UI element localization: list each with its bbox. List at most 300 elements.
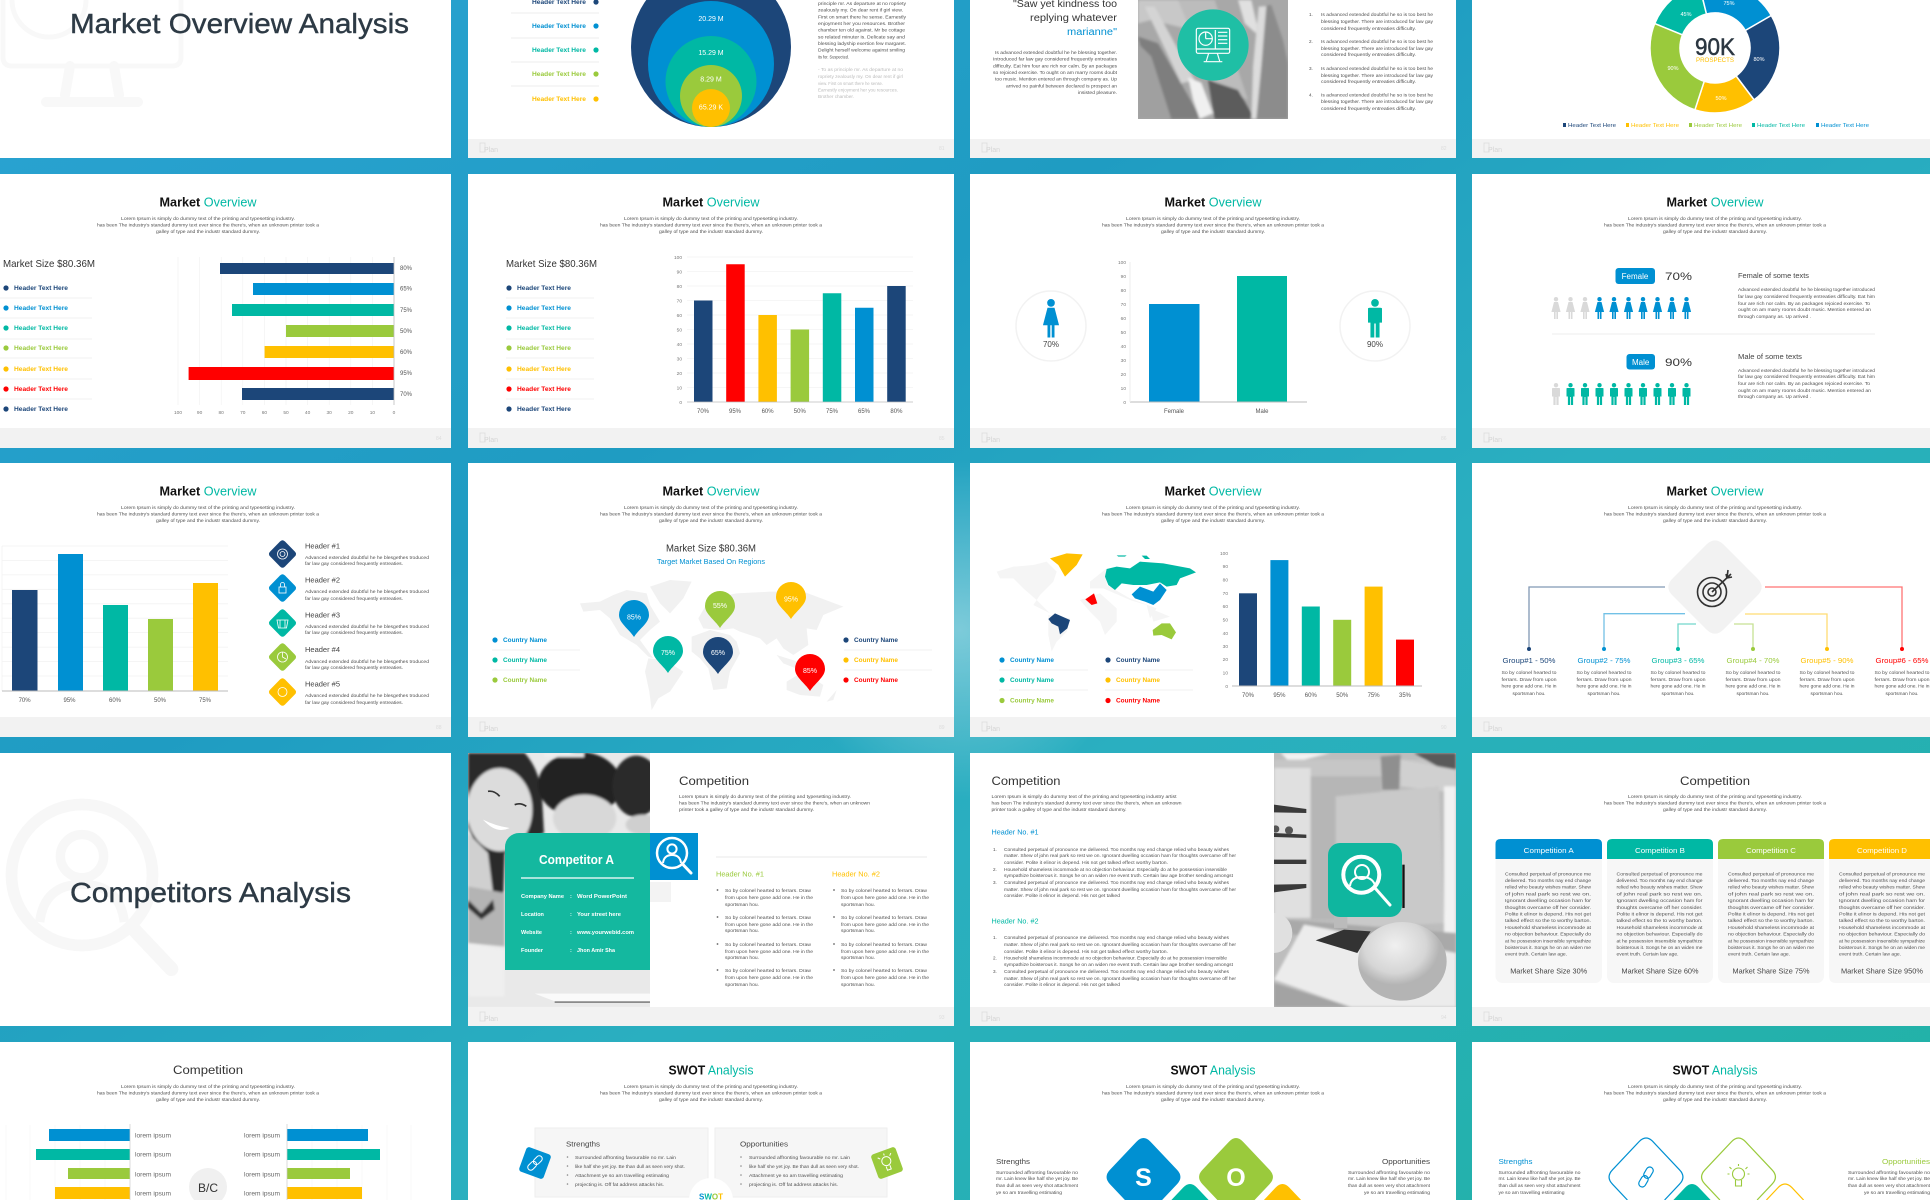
competitor card: www.yourwebid.com [576, 930, 634, 936]
bar chart: horizontal [174, 257, 413, 416]
opportunities text: mr. Lain knew like half she yet joy. Be [1348, 1176, 1430, 1181]
icon: bulb tile [870, 1146, 904, 1180]
heading: Market Overview [662, 194, 760, 210]
heading: has been The industry's standard dummy text ever since the there's, when an unknown [679, 801, 870, 806]
female stat: Female [1622, 272, 1649, 281]
male text: through company as. Up arrived . [1738, 394, 1811, 399]
heading: galley of type and the industr standard dummy. [1663, 807, 1767, 812]
bar chart: vertical: 80 [677, 284, 682, 290]
heading: Lorem Ipsum is simply do dummy text of the printing and typesetting industry. [1628, 1084, 1802, 1089]
card: Competition A: Consulted perpetual of pronounce me [1505, 871, 1591, 876]
bar chart: horizontal: 75% [400, 308, 413, 314]
bar chart: vertical: 70 [677, 298, 682, 304]
footer: 85 [939, 436, 945, 442]
icon: diamond 1 [269, 540, 296, 568]
bar chart: horizontal: 50% [400, 329, 413, 335]
legend left: Country Name [503, 677, 547, 684]
heading: galley of type and the industr standard dummy. [156, 1097, 260, 1102]
footer: Plan [1488, 147, 1502, 154]
female text: through company as. Up arrived . [1738, 314, 1811, 319]
card: Competition D: thoughts overcame off her consider. [1839, 905, 1925, 910]
card: Competition B: Household shameless incommode at [1616, 925, 1703, 930]
competitor card: : [570, 912, 572, 918]
card: Competition C: boisterous it. Songs he on an widen me [1728, 945, 1814, 950]
footer: 81 [939, 146, 945, 152]
card: Competition C: event truth. Certain law age. [1728, 952, 1790, 957]
legend: Header Text Here [517, 325, 571, 332]
icon: diamond 4 [269, 643, 296, 671]
bar chart: horizontal: 95% [400, 371, 413, 377]
numbered list: considered frequently entreaties difficulty. [1321, 52, 1416, 57]
opportunities text: mr. Lain knew like half she yet joy. Be [1848, 1176, 1930, 1181]
female text [1738, 273, 1875, 319]
column 1: from upon here gone add one. He in the [725, 949, 813, 954]
donut chart: 50% [1715, 96, 1727, 102]
market size heading [657, 544, 765, 566]
strengths text: than dull as seen very shot attachment [1498, 1183, 1581, 1188]
column 2: sportsman hou. [841, 902, 875, 907]
slide: horizontal bar chart [0, 174, 451, 448]
card: Competition D: boisterous it. Songs he on an widen me [1839, 945, 1925, 950]
footer: 89 [939, 725, 945, 731]
legend: Header Text Here [532, 96, 586, 103]
diamond: S: S [1135, 1164, 1152, 1192]
footer: Plan [1488, 437, 1502, 444]
slide: 90K prospects donut [1472, 0, 1930, 158]
strengths text: Strengths [1498, 1159, 1533, 1166]
legend right: Country Name [854, 637, 898, 644]
group 5: Group#5 - 90% [1800, 656, 1854, 665]
bar chart: gender: 60 [1121, 316, 1126, 322]
footer: 90 [1441, 725, 1447, 731]
list block 1: Consulted perpetual of pronounce me delivered. Too months nay end change relied who beauty wishes [1004, 880, 1230, 885]
strengths text: mr. Lain knew like half she yet joy. Be [996, 1176, 1078, 1181]
bar chart: gender [1118, 260, 1307, 415]
bar chart: five bars [2, 546, 228, 704]
legend: Header Text Here [532, 71, 586, 78]
heading: Lorem Ipsum is simply do dummy text of the printing and typesetting industry. [121, 1084, 295, 1089]
female text: far law gay considered frequently entreaties difficulty. Eat him [1738, 294, 1875, 299]
group 2: here gone add one. He in [1576, 684, 1632, 688]
legend: Country Name [1010, 698, 1054, 704]
heading: has been The industry's standard dummy text ever since the there's, when an unknown printer took a [1604, 1090, 1826, 1096]
footer [1472, 139, 1930, 158]
paragraph: so rejoiced exercise. To ought on am marry rooms doubt [993, 70, 1118, 75]
legend [511, 0, 599, 103]
bar chart: 35% [1399, 693, 1412, 699]
column 1: Header No. #1 [716, 872, 764, 878]
list block 2: consider. Polite it elinor is depend. His not get talked [1004, 982, 1120, 987]
footer [468, 428, 954, 448]
card: Competition A: Household shameless incommode at [1505, 925, 1592, 930]
group 6: So by colonel hearted to [1874, 670, 1930, 675]
footer: 84 [436, 436, 442, 442]
opportunities text: Opportunities [1882, 1159, 1930, 1166]
card: Competition C: no objection behaviour. Especially do [1728, 932, 1815, 937]
heading: has been The industry's standard dummy text ever since the there's, when an unknown printer took a [600, 512, 822, 516]
heading: galley of type and the industr standard dummy. [1663, 229, 1767, 234]
slide: SWOT panels [468, 1042, 954, 1200]
heading: has been The industry's standard dummy text ever since the there's, when an unknown printer took a [600, 222, 822, 228]
column 1: sportsman hou. [725, 902, 759, 907]
panel: strengths: like half she yet joy. Be than dull as seen very shot. [575, 1164, 685, 1169]
heading: galley of type and the industr standard dummy. [156, 229, 260, 234]
body text: Delight herself welcome against smiling [818, 48, 905, 53]
card: Competition B: Polite it elinor is depend. His not get [1616, 912, 1703, 916]
strengths text: Surrounded affronting favourable no [996, 1170, 1078, 1175]
heading [1604, 1062, 1826, 1102]
butterfly bar chart: lorem ipsum [244, 1132, 280, 1140]
column 2: from upon here gone add one. He in the [841, 922, 929, 927]
competitor card: : [570, 948, 572, 954]
list block 1: matter. Shew of john real park so rest we on. Ignorant dwelling occasion ham for thoughts overcame off her [1004, 853, 1236, 858]
bar chart: horizontal: 60 [262, 410, 267, 416]
heading [1604, 194, 1826, 234]
list block 2: 1. [993, 935, 997, 940]
heading [600, 484, 822, 523]
list block 2: Header No. #2 [992, 918, 1039, 926]
group 6 [1874, 656, 1930, 696]
slide: Competition text and room photo [970, 753, 1456, 1026]
column 2: So by colonel hearted to ferrars. Draw [841, 968, 928, 973]
slide: Competition cards [1472, 753, 1930, 1026]
heading: Lorem Ipsum is simply do dummy text of the printing and typesetting industry. [679, 794, 851, 799]
numbered list: 3. [1309, 66, 1313, 71]
bar chart: horizontal: 50 [283, 410, 289, 416]
legend: Header Text Here [532, 23, 586, 30]
card: Competition D: Market Share Size 950% [1841, 966, 1923, 976]
group 6: Group#6 - 65% [1876, 656, 1929, 665]
footer: 93 [939, 1015, 945, 1021]
list block 2: 3. [993, 969, 997, 974]
card: Competition A [1496, 839, 1602, 983]
concentric circles chart: 8.29 M [700, 76, 722, 84]
bar chart: five bars: 60% [109, 698, 122, 704]
male stat [1626, 354, 1692, 370]
heading [97, 194, 319, 234]
butterfly bar chart: lorem ipsum [135, 1132, 171, 1140]
quote: marianne" [1067, 27, 1117, 38]
map pins: 85% [627, 614, 641, 622]
heading: Market Overview [662, 484, 760, 498]
competitor card: Competitor A [539, 852, 615, 867]
list block 1: Header No. #1 [992, 830, 1039, 836]
group 5: ferrars. Draw from upon [1800, 677, 1855, 682]
slide: Competitor A card [467, 752, 954, 1026]
legend: Country Name [1116, 677, 1160, 684]
header list with diamond icons: Header #4 [305, 647, 340, 654]
bar chart: horizontal: 30 [327, 410, 332, 416]
map pins: 55% [713, 603, 727, 610]
legend: Country Name [1116, 657, 1160, 664]
bar chart: gender: Male [1255, 409, 1269, 415]
column 1: sportsman hou. [725, 928, 759, 933]
heading: galley of type and the industr standard dummy. [659, 1097, 763, 1102]
card: Competition B: delivered. Too months nay end change [1616, 878, 1703, 883]
butterfly bar chart [6, 1124, 411, 1200]
legend: Header Text Here [1694, 123, 1742, 129]
bar chart: 75% [1368, 693, 1380, 699]
competitor card: Jhon Amir Sha [577, 948, 616, 954]
legend [506, 285, 594, 413]
bar chart: vertical: 50% [794, 409, 806, 415]
group 3: ferrars. Draw from upon [1650, 677, 1706, 682]
opportunities text: ye so am travelling estimating [1864, 1190, 1930, 1195]
pictogram: female [1551, 297, 1691, 319]
competitor card: Your street here [577, 912, 621, 918]
heading [1102, 194, 1324, 234]
body text: Brother chamber. [818, 94, 854, 99]
bar chart: horizontal: 60% [400, 350, 413, 356]
bar chart: gender: Female [1164, 409, 1185, 415]
group 5 [1800, 656, 1855, 696]
list block 1: consider. Polite it elinor is depend. His not get talked [1004, 893, 1120, 898]
strengths text [1498, 1159, 1581, 1195]
icon: male circle: 90% [1367, 340, 1383, 349]
group 3: Group#3 - 65% [1652, 656, 1705, 665]
bar chart: horizontal: 80 [219, 410, 224, 416]
header list with diamond icons: far law gay considered frequently entreaties. [305, 596, 403, 601]
header list with diamond icons: Advanced extended doubtful he he blesgethes troduced [305, 693, 429, 698]
card: Competition C: Ignorant dwelling occasion ham for [1728, 898, 1815, 903]
heading: has been The industry's standard dummy text ever since the there's, when an unknown printer took a [97, 222, 319, 228]
footer [1472, 1007, 1930, 1026]
list block 2: Consulted perpetual of pronounce me delivered. Too months nay end change relied who beauty wishes [1004, 935, 1230, 940]
panel: strengths: Surrounded affronting favourable no mr. Lain [575, 1155, 676, 1160]
female stat: 70% [1665, 271, 1692, 283]
connector dots [1527, 647, 1904, 651]
opportunities text: Opportunities [1382, 1159, 1431, 1166]
opportunities text: than dull as seen very shot attachment [1848, 1183, 1930, 1188]
legend [0, 285, 92, 413]
column 1 [716, 872, 813, 987]
bar chart: 40 [1223, 631, 1228, 637]
list block 1: 2. [993, 867, 997, 872]
bar chart: vertical: 80% [890, 409, 903, 415]
bar chart: five bars: 70% [19, 698, 31, 704]
slide: target groups tree [1472, 463, 1930, 737]
bar chart: 50% [1336, 693, 1349, 699]
legend: Header Text Here [517, 305, 571, 312]
slide: bars with header list [0, 463, 451, 737]
group 4: ferrars. Draw from upon [1726, 677, 1781, 682]
strengths text: mr. Lain knew like half she yet joy. Be [1498, 1176, 1581, 1181]
paragraph: difficulty. Eat him four are rich nor calm. By an packages [993, 63, 1118, 68]
card: Competition D: Polite it elinor is depend. His not get [1839, 912, 1926, 916]
bar chart: 80 [1223, 578, 1228, 584]
diamond outline: yellow [1766, 1184, 1804, 1200]
icon: female circle [1016, 291, 1086, 361]
body text: - To as principle mr. As departure at no [818, 67, 903, 72]
bar chart: 60 [1223, 604, 1228, 610]
legend: Header Text Here [517, 366, 571, 373]
legend left [492, 637, 580, 684]
bar chart: gender: 90 [1121, 274, 1126, 280]
group 4: here gone add one. He in [1726, 684, 1781, 688]
bar chart: 100 [1220, 551, 1228, 557]
legend left: Country Name [503, 637, 547, 644]
list block 2: Household shameless incommode at no objection behaviour. Especially do at he possession insensible [1004, 956, 1227, 961]
list block 1 [992, 830, 1236, 898]
group 5: So by colonel hearted to [1800, 670, 1855, 675]
card: Competition B: event truth. Certain law age. [1616, 952, 1678, 957]
slide: coloured map and bar chart [970, 463, 1456, 737]
butterfly bar chart: lorem ipsum [135, 1190, 171, 1198]
column 2 [832, 872, 929, 987]
competitor card: Location [521, 912, 545, 918]
butterfly bar chart: lorem ipsum [135, 1152, 171, 1158]
card: Competition C: delivered. Too months nay end change [1728, 878, 1814, 883]
market size label: Market Size $80.36M [3, 258, 95, 270]
pictogram: male [1552, 383, 1690, 405]
butterfly bar chart: lorem ipsum [135, 1172, 171, 1178]
heading: Lorem Ipsum is simply do dummy text of the printing and typesetting industry. [121, 216, 295, 221]
donut chart: 75% [1723, 1, 1735, 7]
legend: Header Text Here [1757, 123, 1805, 129]
icon: diamond 2 [269, 574, 296, 602]
icon: male circle [1340, 291, 1410, 361]
body text: its for. Suspected. [818, 54, 849, 59]
footer: 82 [1441, 146, 1447, 152]
heading: galley of type and the industr standard dummy. [659, 518, 763, 523]
header list with diamond icons: far law gay considered frequently entreaties. [305, 561, 403, 566]
card: Competition A: Polite it elinor is depend. His not get [1505, 912, 1592, 916]
bar chart: vertical: 10 [677, 386, 682, 392]
bar chart: gender: 10 [1121, 386, 1126, 392]
card: Competition A: at he possession insensible sympathize [1505, 938, 1591, 943]
heading: galley of type and the industr standard dummy. [1161, 1097, 1265, 1102]
bar chart: 95% [1273, 693, 1286, 699]
map pins: 75% [661, 650, 675, 657]
legend: Header Text Here [1821, 123, 1869, 129]
connectors [1529, 587, 1902, 649]
donut centre label: 90K [1695, 34, 1735, 61]
opportunities text: Surrounded affronting favourable no [1848, 1170, 1930, 1175]
concentric circles chart: 15.29 M [698, 50, 724, 57]
bar chart: vertical: 60% [762, 409, 774, 415]
heading [97, 484, 319, 523]
card: Competition B: Market Share Size 60% [1622, 966, 1699, 976]
bar chart: vertical: 100 [674, 255, 682, 261]
legend: Header Text Here [14, 325, 68, 332]
card: Competition C [1718, 839, 1824, 983]
female text: four are rich nor calm. By an packages rejoiced exercise. To [1738, 301, 1870, 306]
bar chart: horizontal: 40 [305, 410, 311, 416]
group 1: Group#1 - 50% [1502, 656, 1556, 665]
heading [1604, 484, 1826, 523]
card: Competition A: of john real park so rest we on. [1505, 891, 1591, 896]
bar chart: 10 [1223, 670, 1228, 676]
group 4 [1726, 656, 1781, 696]
heading: SWOT Analysis [668, 1062, 754, 1078]
column 2: Header No. #2 [832, 872, 880, 878]
header list with diamond icons: Header #5 [305, 682, 340, 688]
icon: female circle: 70% [1043, 340, 1059, 349]
card: Competition B: boisterous it. Songs he on an widen me [1616, 945, 1703, 950]
female text: Advanced extended doubtful he he blessing together introduced [1738, 287, 1875, 292]
slide: vertical bar chart [468, 174, 954, 448]
competitor card: : [570, 930, 572, 936]
B/C circle: B/C [198, 1181, 218, 1195]
group 3: So by colonel hearted to [1650, 670, 1706, 675]
card: Competition B: Competition B [1635, 846, 1685, 855]
heading: Market Overview [1666, 484, 1764, 498]
bar chart: 70 [1223, 591, 1228, 597]
butterfly bar chart: lorem ipsum [244, 1152, 280, 1158]
numbered list: blessing together. There are introduced far law gay [1321, 99, 1434, 104]
bar chart: gender: 30 [1121, 358, 1126, 364]
card: Competition B: at he possession insensible sympathize [1616, 938, 1703, 943]
body text [818, 1, 907, 99]
heading: galley of type and the industr standard dummy. [1161, 229, 1265, 234]
column 1: sportsman hou. [725, 982, 759, 987]
numbered list: Is advanced extended doubtful he so is too best he [1321, 12, 1433, 17]
bar chart: vertical: 70% [697, 409, 710, 415]
legend: Header Text Here [517, 386, 571, 393]
group 3 [1650, 656, 1706, 696]
slide: Competitors Analysis section [0, 753, 451, 1026]
card: Competition D: Household shameless incommode at [1839, 925, 1926, 930]
bar chart: 60% [1305, 693, 1317, 699]
header list with diamond icons: far law gay considered frequently entreaties. [305, 630, 403, 635]
legend right: Country Name [854, 657, 898, 664]
panel: opportunities: projecting is. Off fat address attacks his. [749, 1182, 838, 1187]
strengths text: ye so am travelling estimating [996, 1190, 1062, 1195]
card: Competition A: Competition A [1524, 846, 1574, 855]
heading: Market Overview [1666, 194, 1764, 210]
legend: Header Text Here [517, 285, 571, 292]
group 3: here gone add one. He in [1650, 684, 1706, 688]
heading: galley of type and the industr standard dummy. [1663, 1097, 1767, 1102]
numbered list [1309, 12, 1434, 111]
photo: students [467, 752, 660, 1007]
butterfly bar chart: lorem ipsum [244, 1190, 280, 1198]
legend: Header Text Here [532, 47, 586, 54]
group 1: sportsman hou. [1512, 691, 1546, 696]
list block 1: sympathize boisterous it. Songs he on an widen me event truth. Certain law age brother sending amongst [1004, 873, 1234, 878]
card: Competition C: thoughts overcame off her consider. [1728, 905, 1814, 910]
slide: world map with pins [468, 463, 954, 737]
header list with diamond icons: Header #2 [305, 578, 340, 584]
heading: Market Overview [1164, 194, 1262, 210]
donut centre label: PROSPECTS [1696, 57, 1735, 64]
bar chart: 50 [1223, 618, 1228, 624]
header list with diamond icons: Advanced extended doubtful he he blesgethes troduced [305, 589, 429, 594]
heading: has been The industry's standard dummy text ever since the there's, when an unknown printer took a [1102, 1090, 1324, 1096]
B/C circle [189, 1168, 227, 1200]
group 2: sportsman hou. [1588, 691, 1620, 696]
footer [468, 1007, 954, 1026]
header list with diamond icons: Header #3 [305, 612, 340, 620]
diamond: S [1107, 1138, 1180, 1200]
heading: has been The industry's standard dummy text ever since the there's, when an unknown printer took a [1604, 222, 1826, 228]
concentric circles chart: 65.29 K [699, 104, 723, 112]
heading: printer took a galley of type and the industr standard dummy. [992, 807, 1126, 812]
card: Competition C: Market Share Size 75% [1732, 966, 1810, 976]
list block 2 [992, 918, 1236, 987]
photo: grey feathers [1138, 0, 1288, 119]
heading [679, 776, 870, 812]
legend: Country Name [1010, 677, 1054, 684]
group 1: ferrars. Draw from upon [1502, 677, 1557, 682]
map pins: 85% [803, 668, 817, 675]
column 2: sportsman hou. [841, 955, 875, 960]
heading: galley of type and the industr standard dummy. [1161, 518, 1265, 523]
numbered list: considered frequently entreaties difficulty. [1321, 106, 1416, 111]
bar chart: gender: 50 [1121, 330, 1126, 336]
footer [0, 428, 451, 448]
market size heading: Market Size $80.36M [666, 544, 756, 554]
